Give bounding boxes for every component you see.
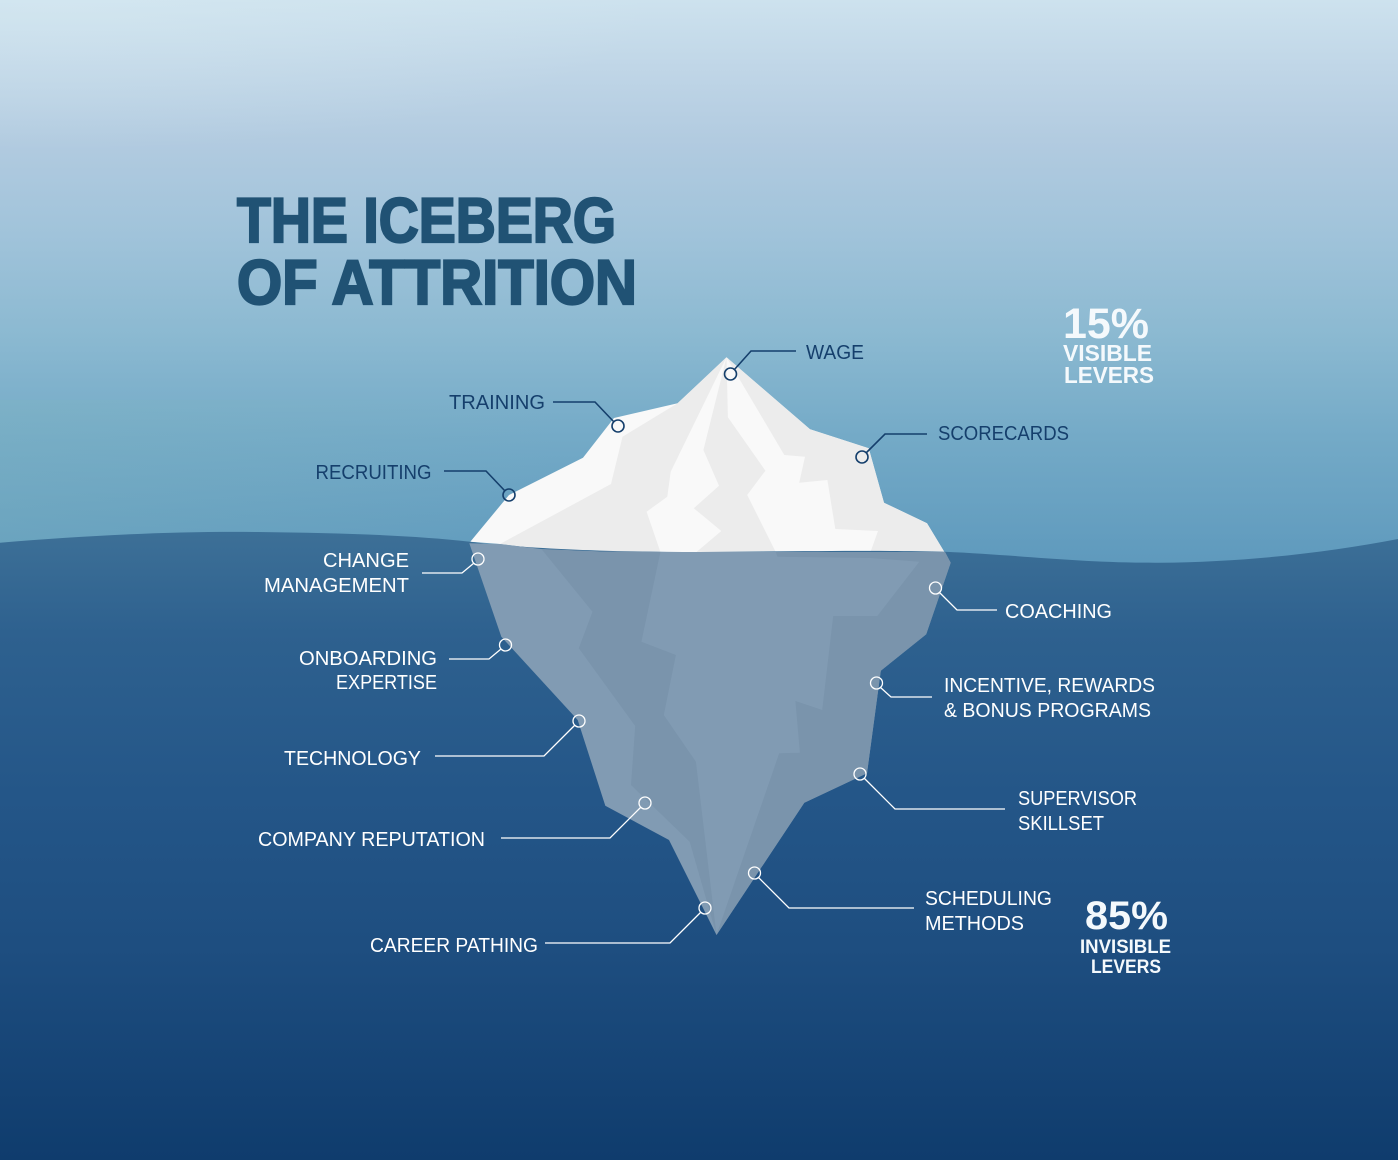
callout: scheduling methods: METHODS bbox=[925, 913, 1024, 935]
title: OF ATTRITION bbox=[237, 248, 637, 318]
callout: supervisor skillset: SKILLSET bbox=[1018, 813, 1104, 835]
callout: change management: MANAGEMENT bbox=[264, 575, 409, 597]
callout: change management: CHANGE bbox=[323, 550, 409, 572]
stat: 85% invisible levers: LEVERS bbox=[1091, 957, 1161, 978]
callout: incentive, rewards and bonus programs: & BONUS PROGRAMS bbox=[944, 700, 1151, 722]
callout: career pathing bbox=[370, 902, 711, 957]
sky background bbox=[0, 0, 1398, 560]
callout: coaching bbox=[930, 582, 1112, 623]
callout: onboarding expertise: ONBOARDING bbox=[299, 648, 437, 670]
title: THE ICEBERG bbox=[237, 186, 616, 256]
callout: scorecards: SCORECARDS bbox=[938, 423, 1069, 445]
callout: recruiting: RECRUITING bbox=[316, 462, 432, 484]
stat: 85% invisible levers: 85% bbox=[1085, 894, 1168, 938]
stat: 15% visible levers: VISIBLE bbox=[1063, 340, 1152, 366]
stat: 15% visible levers: LEVERS bbox=[1064, 362, 1154, 388]
callout: wage bbox=[724, 342, 864, 380]
callout: recruiting bbox=[316, 462, 515, 501]
callout: scorecards bbox=[856, 423, 1069, 463]
stat: 15% visible levers bbox=[1063, 300, 1154, 388]
callout: supervisor skillset: SUPERVISOR bbox=[1018, 788, 1137, 810]
callout: scheduling methods bbox=[748, 867, 1052, 935]
iceberg below water bbox=[469, 543, 951, 935]
callout: company reputation: COMPANY REPUTATION bbox=[258, 829, 485, 851]
iceberg above water bbox=[470, 357, 945, 553]
callout: coaching: COACHING bbox=[1005, 601, 1112, 623]
callout: scheduling methods: SCHEDULING bbox=[925, 888, 1052, 910]
callout: incentive, rewards and bonus programs bbox=[870, 675, 1155, 722]
title bbox=[237, 186, 637, 318]
callout: incentive, rewards and bonus programs: INCENTIVE, REWARDS bbox=[944, 675, 1155, 697]
callout: technology: TECHNOLOGY bbox=[284, 748, 421, 770]
callout: company reputation bbox=[258, 797, 651, 851]
callout: onboarding expertise: EXPERTISE bbox=[336, 672, 437, 694]
callout: wage: WAGE bbox=[806, 342, 864, 364]
callout: technology bbox=[284, 715, 585, 770]
callout: supervisor skillset bbox=[854, 768, 1137, 835]
callout: onboarding expertise bbox=[299, 639, 512, 694]
stat: 85% invisible levers bbox=[1080, 894, 1171, 978]
stat: 15% visible levers: 15% bbox=[1063, 300, 1149, 348]
callout: career pathing: CAREER PATHING bbox=[370, 935, 538, 957]
callout: training bbox=[449, 392, 624, 432]
ocean water bbox=[0, 532, 1398, 1160]
callout: change management bbox=[264, 550, 484, 597]
stat: 85% invisible levers: INVISIBLE bbox=[1080, 937, 1171, 958]
callout: training: TRAINING bbox=[449, 392, 545, 414]
